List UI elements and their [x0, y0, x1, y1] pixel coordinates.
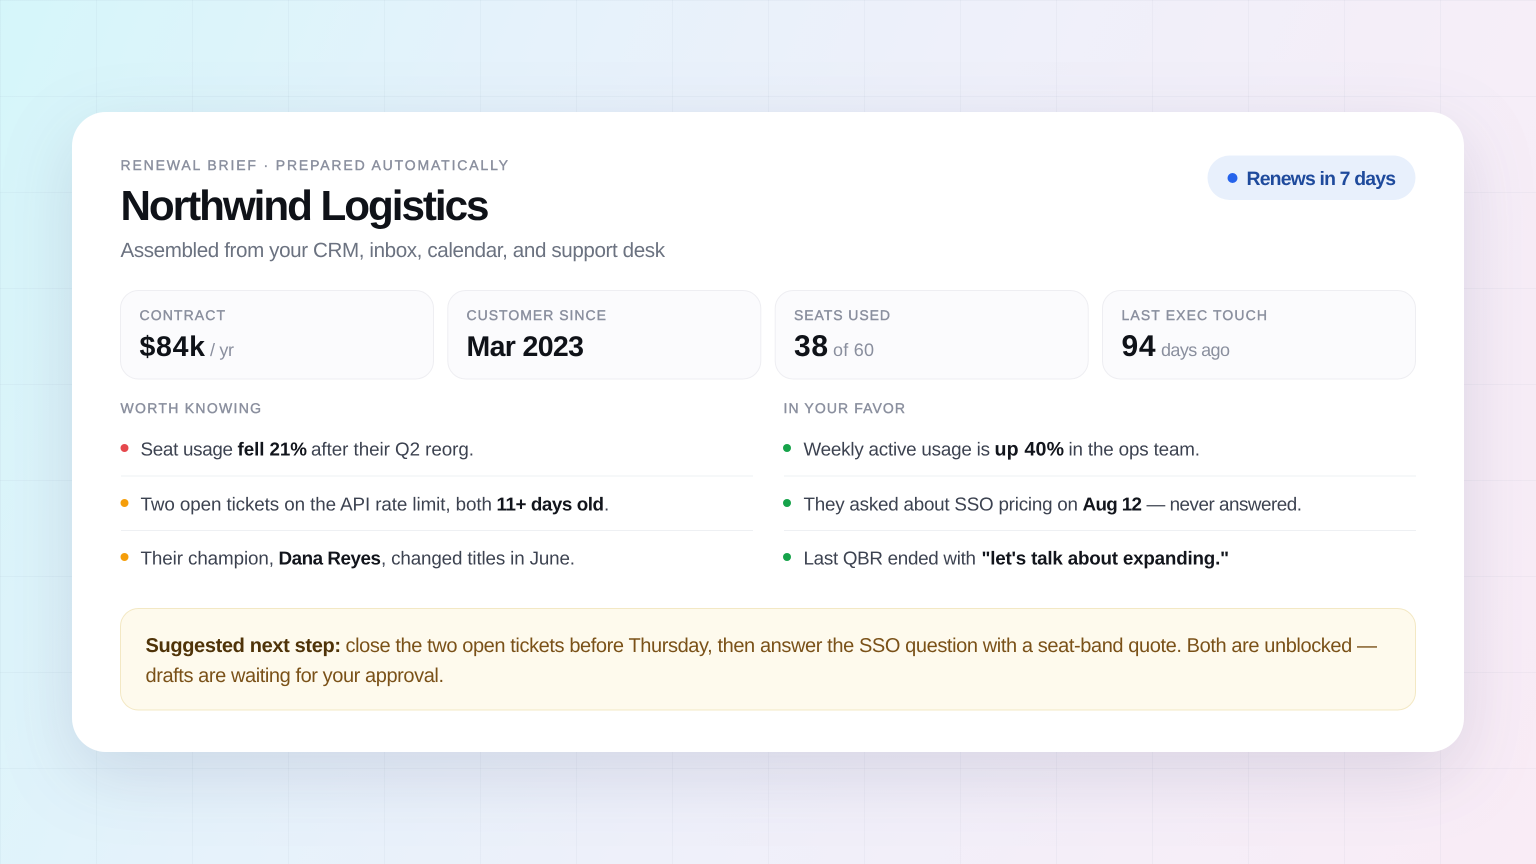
stat: last exec touch: LAST EXEC TOUCH [1122, 307, 1267, 323]
heading: worth knowing: WORTH KNOWING [120, 400, 261, 416]
item: open tickets: 11+ days old [496, 494, 604, 515]
stat: customer since: Mar 2023 [466, 331, 584, 363]
stat: seats used: 38 [794, 330, 828, 363]
item: weekly usage: in the ops team. [1068, 439, 1200, 460]
stat: seats used [775, 290, 1088, 379]
item: sso pricing [783, 494, 1302, 515]
item: seat usage: fell 21% [238, 439, 307, 460]
item: qbr [783, 548, 1229, 569]
item: qbr: Last QBR ended with [804, 548, 976, 569]
item: sso pricing: — never answered. [1146, 494, 1302, 515]
item: weekly usage: Weekly active usage is [804, 439, 990, 460]
panel: main card [72, 112, 1464, 752]
item: champion: Their champion, [140, 548, 274, 569]
stat: last exec touch: 94 [1122, 330, 1156, 363]
stat: customer since: CUSTOMER SINCE [466, 307, 606, 323]
item: open tickets: . [604, 494, 609, 515]
eyebrow: RENEWAL BRIEF · PREPARED AUTOMATICALLY [120, 157, 509, 173]
item: weekly usage: up 40% [994, 439, 1064, 461]
status pill: renews in 7 days: Renews in 7 days [1246, 168, 1396, 190]
title: Northwind Logistics [120, 182, 490, 229]
heading: in your favor: IN YOUR FAVOR [784, 400, 905, 416]
status pill: renews in 7 days [1208, 156, 1416, 200]
stat: contract: CONTRACT [140, 307, 225, 323]
item: champion: Dana Reyes [278, 548, 381, 569]
stat: seats used: SEATS USED [794, 307, 890, 323]
item: seat usage: after their Q2 reorg. [311, 439, 474, 460]
callout: suggested next step: close the two open tickets before Thursday, then answer the SSO question with a seat-band quote. Both are unblocked — [346, 635, 1377, 657]
panel: in your favor [783, 400, 1416, 569]
item: champion [120, 548, 575, 569]
item: seat usage: Seat usage [140, 439, 233, 460]
subtitle: Assembled from your CRM, inbox, calendar, and support desk [120, 239, 666, 262]
stat: last exec touch: days ago [1161, 340, 1230, 360]
item: weekly usage [783, 439, 1200, 461]
item: seat usage [120, 439, 474, 460]
stat: contract [120, 290, 434, 379]
panel: worth knowing [120, 400, 753, 569]
callout: suggested next step: Suggested next step: [146, 635, 341, 657]
stat: seats used: of 60 [833, 340, 874, 360]
item: champion: , changed titles in June. [381, 548, 575, 569]
item: qbr: "let's talk about expanding." [982, 548, 1229, 569]
callout: suggested next step [120, 608, 1416, 710]
stat: last exec touch [1102, 290, 1416, 379]
item: sso pricing: They asked about SSO pricing on [804, 494, 1078, 515]
callout: suggested next step: drafts are waiting for your approval. [146, 665, 444, 687]
stat: contract: / yr [210, 340, 234, 360]
stat: contract: $84k [140, 331, 205, 363]
item: sso pricing: Aug 12 [1082, 494, 1142, 515]
stat: customer since [448, 290, 761, 379]
item: open tickets: Two open tickets on the API rate limit, both [140, 494, 492, 515]
